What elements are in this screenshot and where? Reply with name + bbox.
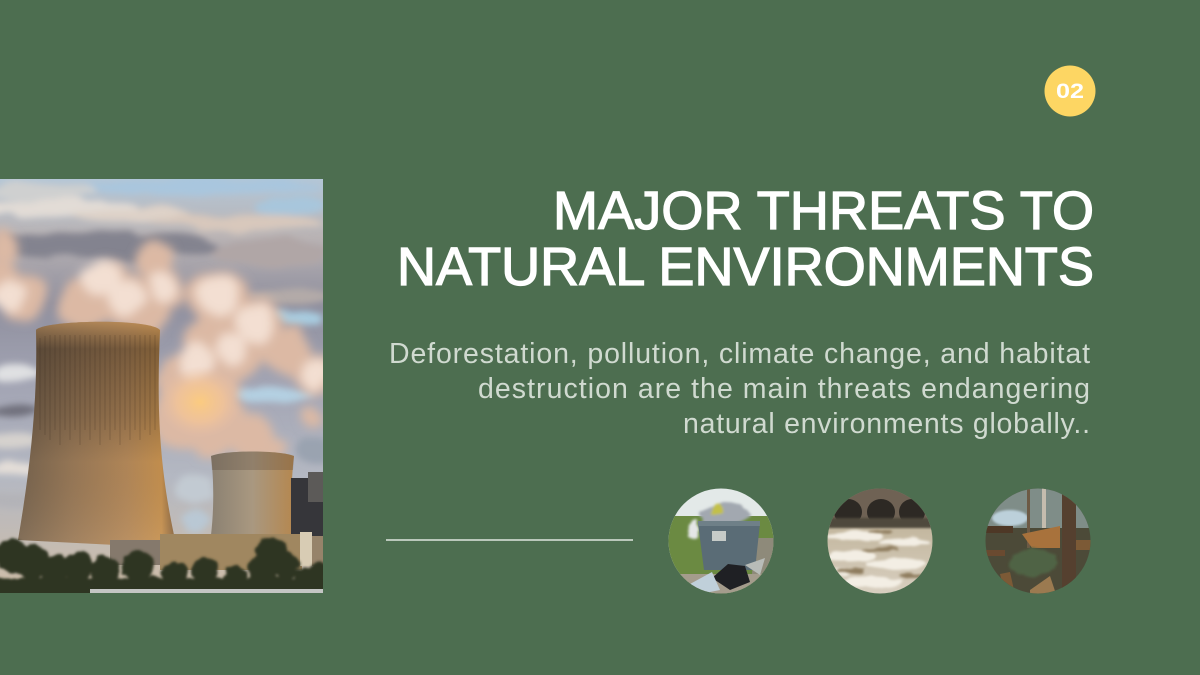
photo circle: overflowing dumpster: [668, 488, 775, 594]
body text: [389, 338, 1090, 440]
badge: 02: 02: [1056, 80, 1084, 103]
photo: cooling towers with steam clouds: [0, 179, 336, 602]
body text: Deforestation, pollution, climate change, and habitat: [389, 338, 1090, 370]
title: NATURAL ENVIRONMENTS: [397, 237, 1094, 297]
power plant buildings: [110, 532, 323, 570]
body text: destruction are the main threats endangering: [478, 373, 1090, 405]
icon: small cooling tower: [211, 452, 323, 540]
divider line: [386, 539, 633, 541]
icon: large cooling tower: [18, 322, 174, 548]
photo circle: logged forest: [985, 488, 1091, 594]
title: MAJOR THREATS TO: [553, 181, 1094, 241]
photo circle: polluted river under bridge: [824, 488, 933, 594]
title: [397, 181, 1094, 297]
badge: 02: [1044, 66, 1096, 116]
tree line: [0, 536, 323, 593]
body text: natural environments globally..: [683, 408, 1090, 440]
